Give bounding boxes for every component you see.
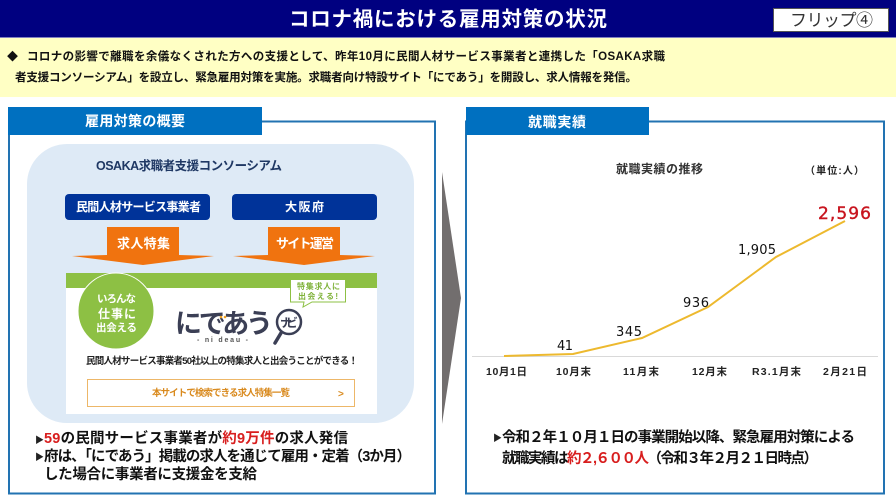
data labels (557, 204, 871, 354)
overview bullet points: ▶ (35, 452, 44, 462)
site logo: ナビ (280, 315, 298, 330)
consortium diagram (27, 144, 414, 423)
axis labels: 10月末 (556, 365, 592, 378)
results summary text: 就職実績は約２,６００人（令和３年２月２１日時点） (502, 449, 818, 467)
title bar: コロナ禍における雇用対策の状況 (289, 8, 607, 31)
arrow: site operation: サイト運営 (276, 236, 334, 251)
badge circle (78, 273, 154, 349)
consortium title: OSAKA求職者支援コンソーシアム (96, 158, 282, 173)
heading: overview: 雇用対策の概要 (85, 113, 185, 129)
intro text band: 者支援コンソーシアム」を設立し、緊急雇用対策を実施。求職者向け特設サイト「にであう」を開設し、求人情報を発信。 (15, 70, 637, 84)
speech bubble: 出会える! (298, 291, 338, 301)
intro text band: コロナの影響で離職を余儀なくされた方への支援として、昨年10月に民間人材サービス事業者と連携した「OSAKA求職 (27, 49, 666, 63)
site logo: - ni deau - (197, 337, 249, 344)
link button (88, 380, 354, 406)
data labels: 2,596 (818, 204, 871, 224)
website preview card (66, 273, 377, 414)
data labels: 936 (683, 296, 709, 311)
overview bullet points (35, 429, 411, 483)
site logo (175, 309, 301, 344)
site tagline: 民間人材サービス事業者50社以上の特集求人と出会うことができる！ (86, 355, 358, 367)
axis labels: 2月21日 (823, 366, 867, 378)
unit label: （単位:人） (805, 164, 864, 177)
link button: > (338, 389, 344, 400)
overview bullet points: 59の民間サービス事業者が約9万件の求人発信 (44, 429, 348, 447)
results summary text: ▶ (493, 433, 502, 443)
arrow: overview to results (442, 172, 461, 424)
axis labels (486, 365, 867, 378)
overview bullet points: した場合に事業者に支援金を支給 (44, 465, 258, 483)
heading: results (466, 107, 649, 135)
axis labels: 12月末 (692, 365, 728, 378)
results summary text (493, 428, 855, 467)
flip number badge: フリップ④ (790, 11, 873, 30)
chart title: 就職実績の推移 (616, 161, 703, 176)
title bar (0, 0, 896, 38)
badge circle: いろんな (97, 293, 136, 305)
trend line (504, 221, 845, 356)
overview bullet points: ▶ (35, 435, 44, 445)
panel: employment results (466, 107, 884, 494)
data labels: 41 (557, 339, 573, 354)
intro text band (0, 38, 896, 97)
arrow: site operation (233, 227, 375, 265)
box: private staffing companies: 民間人材サービス事業者 (76, 199, 201, 214)
results summary text: 令和２年１０月１日の事業開始以降、緊急雇用対策による (502, 428, 855, 446)
link button: 本サイトで検索できる求人特集一覧 (152, 387, 290, 399)
axis labels: 10月1日 (486, 366, 527, 378)
arrow: job features (72, 227, 214, 265)
heading: overview (8, 107, 262, 135)
axis labels: 11月末 (623, 365, 660, 378)
data labels: 345 (616, 325, 642, 340)
arrow: job features: 求人特集 (117, 236, 170, 251)
overview bullet points: 府は、「にであう」掲載の求人を通じて雇用・定着（3か月） (44, 447, 411, 465)
badge circle: 出会える (96, 321, 137, 334)
data labels: 1,905 (738, 243, 776, 258)
intro text band: ◆ (7, 50, 18, 63)
line chart: employment results trend (472, 161, 878, 378)
box: Osaka prefecture (232, 194, 377, 220)
flip number badge (774, 8, 888, 32)
box: Osaka prefecture: 大阪府 (285, 199, 324, 214)
site logo: にであう (175, 309, 273, 339)
box: private staffing companies (65, 194, 210, 220)
speech bubble: 特集求人に (297, 281, 340, 291)
panel: employment measures overview (8, 107, 435, 494)
axis labels: R3.1月末 (752, 365, 802, 378)
badge circle: 仕事に (98, 306, 136, 321)
speech bubble (290, 280, 346, 307)
heading: results: 就職実績 (528, 114, 586, 130)
